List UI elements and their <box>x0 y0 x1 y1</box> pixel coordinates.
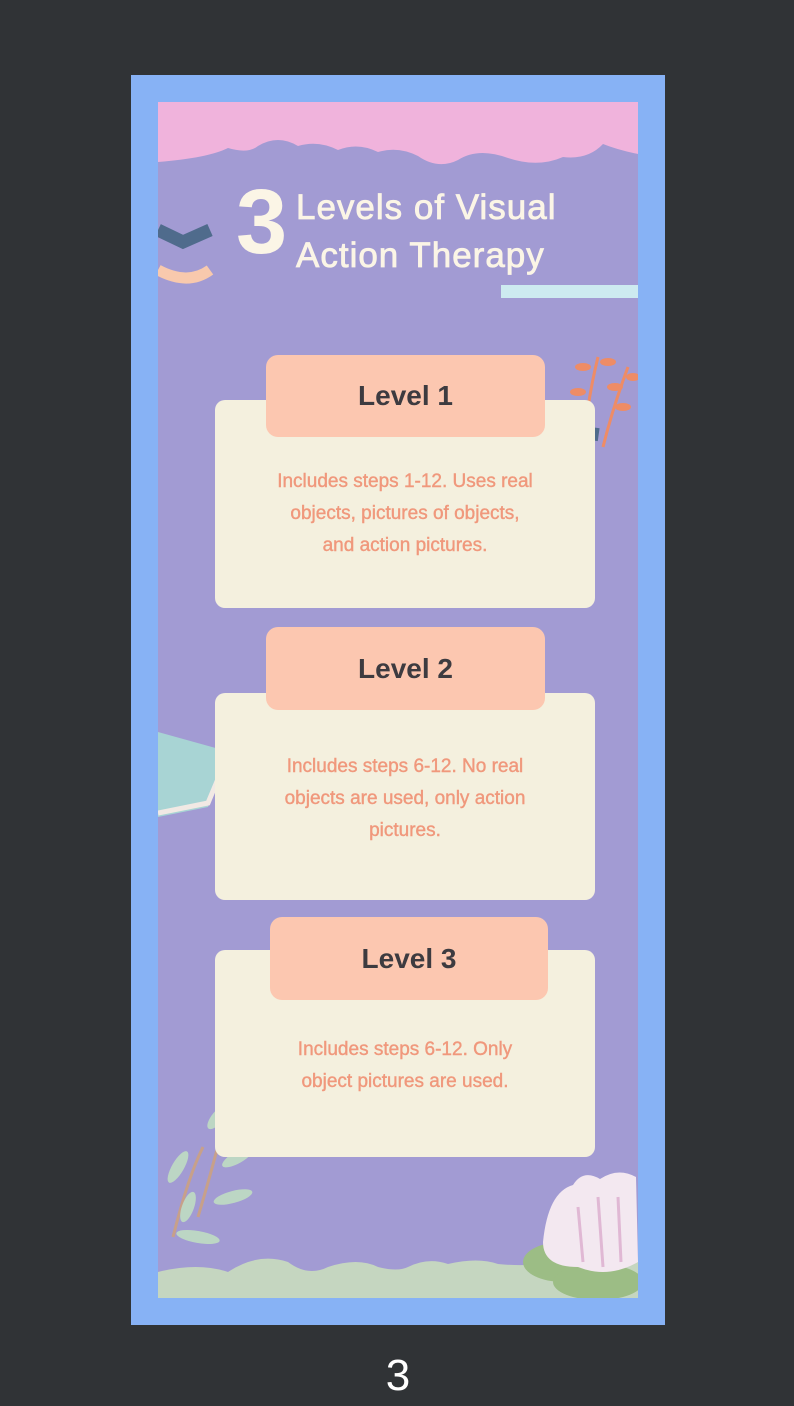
card: level 1 <box>215 355 595 608</box>
decoration: book <box>158 732 215 817</box>
title <box>236 171 557 275</box>
lotus flower <box>523 1172 638 1298</box>
card: level 1: and action pictures. <box>323 535 487 556</box>
tab: level 3 <box>270 917 548 1000</box>
card: level 3 <box>215 917 595 1157</box>
frame <box>131 75 665 1325</box>
tab: level 1 <box>266 355 545 437</box>
title: 3 <box>236 171 287 273</box>
card: level 1: Includes steps 1-12. Uses real <box>277 471 533 492</box>
inner panel <box>158 102 638 1298</box>
card: level 3: object pictures are used. <box>301 1071 508 1092</box>
card: level 2: Includes steps 6-12. No real <box>287 756 523 777</box>
top pink wave <box>158 102 638 164</box>
card: level 2: pictures. <box>369 820 441 841</box>
card: level 1: objects, pictures of objects, <box>290 503 520 524</box>
tab: level 2 <box>266 627 545 710</box>
page number: 3 <box>386 1351 410 1400</box>
bottom green wave <box>158 1258 638 1298</box>
decoration: orange plant <box>570 356 638 448</box>
leaves branch <box>168 1112 252 1244</box>
tab: level 3: Level 3 <box>362 942 456 974</box>
card: level 2: objects are used, only action <box>285 788 525 809</box>
title: Levels of Visual <box>296 188 557 227</box>
decoration: chevrons <box>158 224 214 284</box>
decoration: light blue bar <box>501 285 638 298</box>
tab: level 1: Level 1 <box>358 380 453 411</box>
tab: level 2: Level 2 <box>358 652 453 684</box>
title: Action Therapy <box>296 236 545 275</box>
card: level 3: Includes steps 6-12. Only <box>298 1039 512 1060</box>
card: level 2 <box>215 627 595 900</box>
